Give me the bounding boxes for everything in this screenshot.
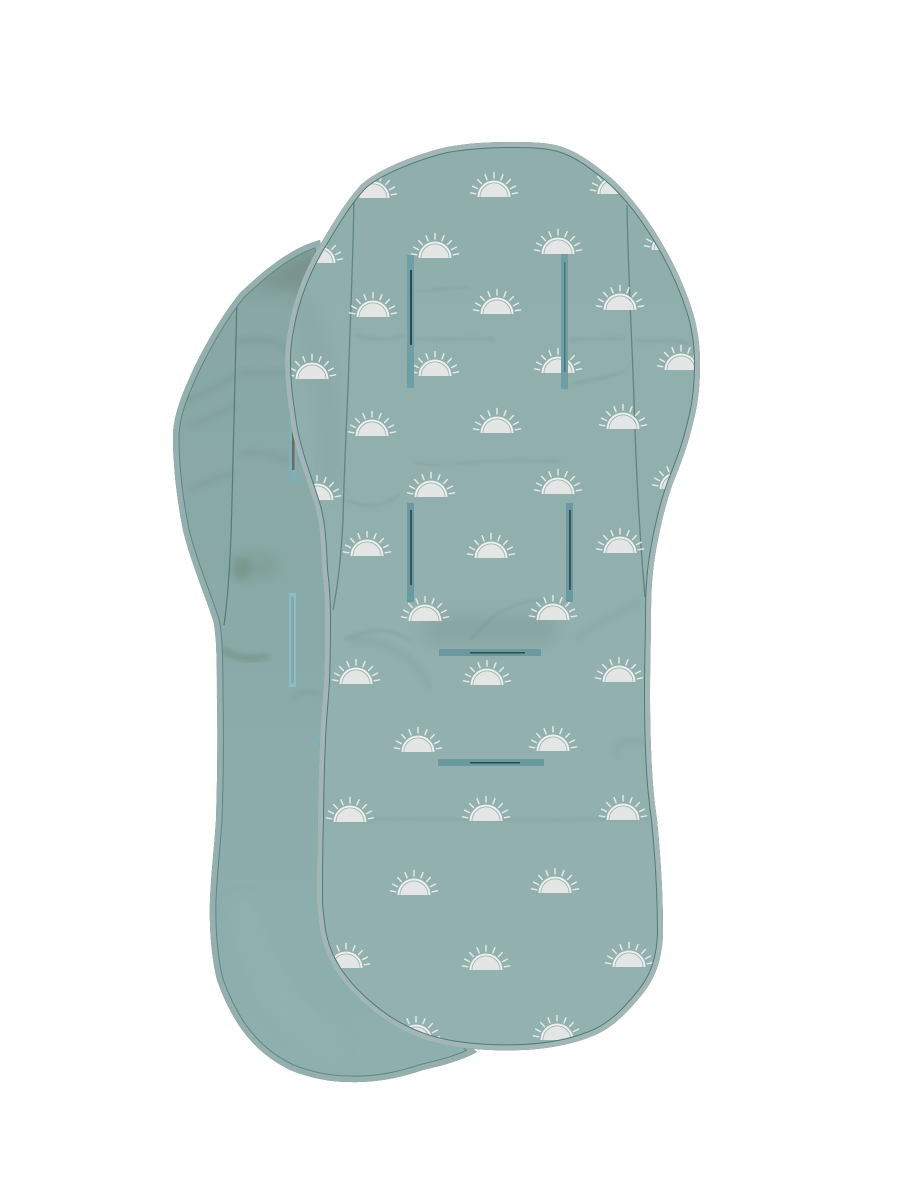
harness slot: middle left <box>407 503 414 602</box>
quilting seams <box>333 196 645 610</box>
back strap slot lower <box>289 593 296 687</box>
edge piping with stitch line <box>285 142 700 1050</box>
product photo: reversible stroller liner <box>173 142 700 1082</box>
harness slot: crotch lower <box>438 759 544 766</box>
front liner: sun print side <box>285 142 705 1050</box>
back strap slot upper <box>289 410 297 483</box>
sun print pattern <box>288 170 705 1041</box>
back liner: plain reverse side <box>173 240 477 1082</box>
harness slot: upper left <box>407 255 414 388</box>
harness slot: crotch upper <box>439 649 541 656</box>
back small stitch mark <box>317 733 320 741</box>
back piping <box>173 240 477 1082</box>
back seam <box>224 297 237 625</box>
quilted shading <box>300 287 690 820</box>
harness slot: upper right <box>561 254 568 389</box>
back folds and shading <box>185 245 340 1050</box>
harness slot: middle right <box>566 503 573 602</box>
